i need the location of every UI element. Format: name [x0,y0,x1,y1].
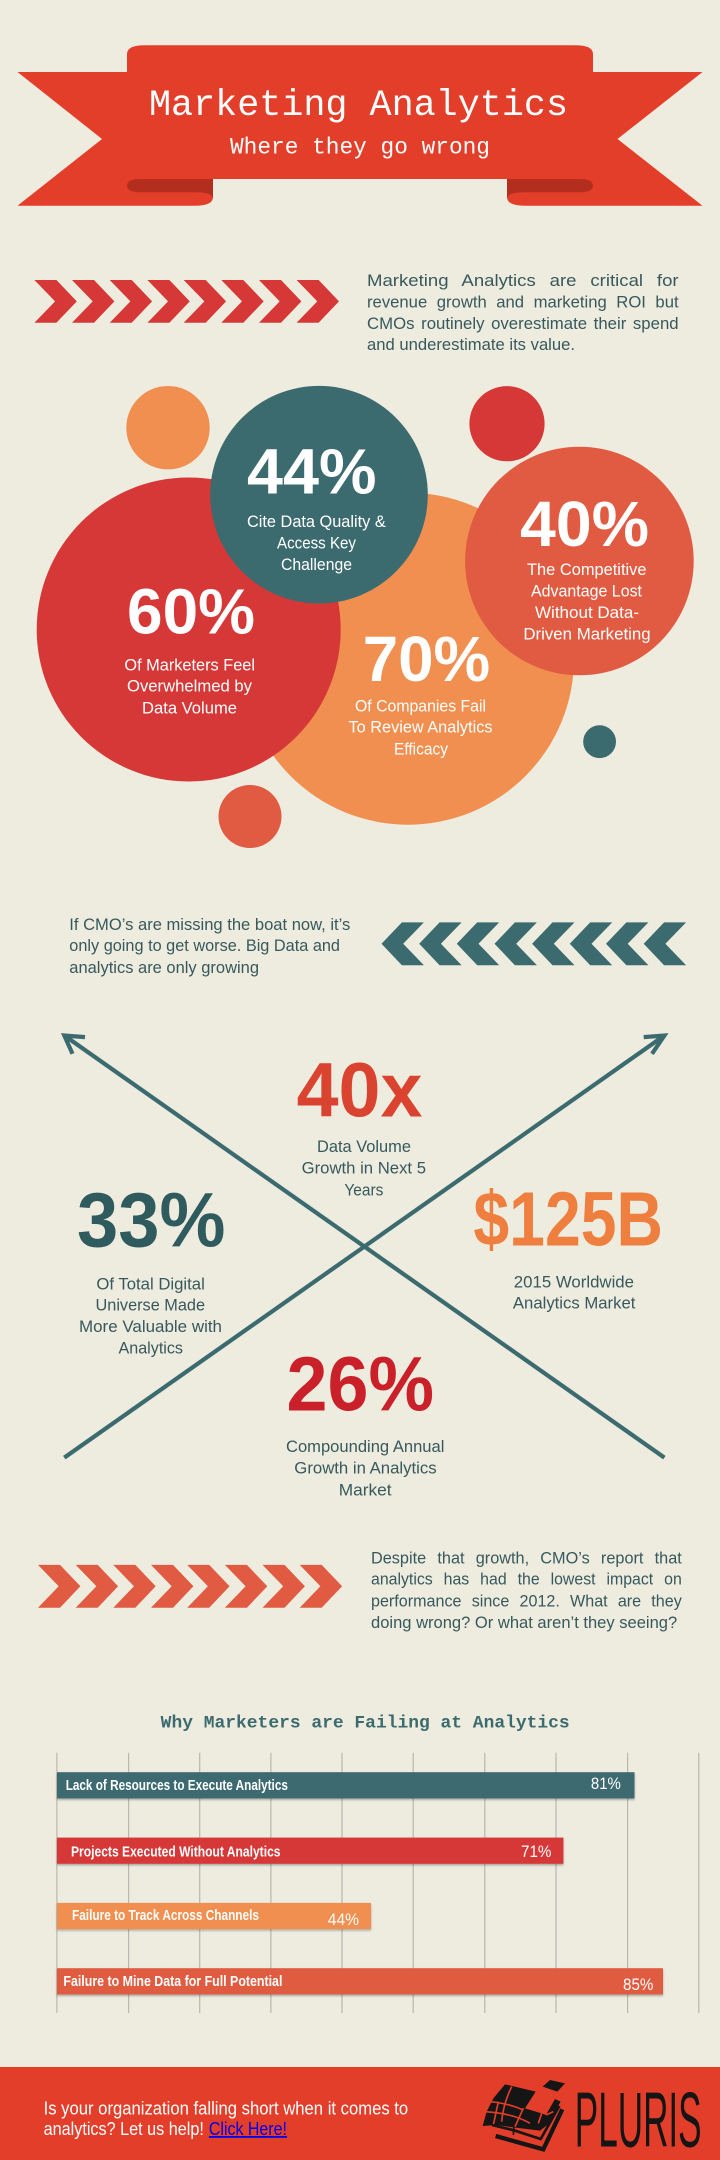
bar: lack of resources: Lack of Resources to Execute Analytics [66,1778,288,1794]
call to action: Click Here! [209,2119,287,2139]
bar: projects executed [57,1838,563,1864]
stat: 40x: Data Volume [317,1137,411,1156]
stat: 33 percent: 33% [77,1178,225,1264]
bar: failure to track: 44% [328,1911,359,1929]
bubble: 70 percent: Of Companies Fail [355,697,486,715]
intro text: Marketing Analytics are critical for [367,271,679,290]
intro text: and underestimate its value. [367,335,575,354]
ribbon fold left [127,179,213,199]
call to action: Is your organization falling short when it comes to [44,2098,408,2118]
stat: 26 percent: Growth in Analytics [294,1458,437,1478]
bubble: 60 percent [37,478,341,782]
bubble: small red [469,386,545,461]
chevron arrows: intro [34,280,339,323]
stat: 40x: Years [344,1180,383,1200]
bubble: small coral [218,785,282,848]
second text block [69,915,350,977]
stat: 33 percent: Of Total Digital [96,1274,205,1293]
stat: 26 percent: 26% [286,1342,434,1428]
third text block [371,1548,682,1632]
bar: projects executed: Projects Executed Without Analytics [71,1844,280,1860]
bubble: 40 percent: Without Data- [535,604,639,622]
bar: lack of resources [57,1772,634,1798]
footer [0,2067,720,2160]
bar chart [57,1753,699,2013]
second text block: If CMO’s are missing the boat now, it’s [69,915,350,934]
bubble: 40 percent: Driven Marketing [523,625,651,643]
third text block: analytics has had the lowest impact on [371,1570,682,1588]
second text block: analytics are only growing [69,958,259,977]
bubble: 70 percent: To Review Analytics [348,718,492,736]
bubble: 44 percent: 44% [247,435,376,507]
bubble: small teal [583,725,616,758]
bubble: 44 percent [210,386,428,604]
arrow: up left [64,1036,664,1458]
stat: 33 percent: More Valuable with [79,1317,222,1336]
intro text: CMOs routinely overestimate their spend [367,314,679,333]
stat: 40x: 40x [297,1048,423,1134]
bubble chart [37,386,694,848]
subtitle: Where they go wrong [230,134,490,160]
bubble: 40 percent [465,447,694,675]
bubble: 70 percent [242,493,574,825]
bubble: 44 percent: Access Key [277,534,357,552]
stat: 40x: Growth in Next 5 [302,1158,426,1178]
bar: lack of resources: 81% [591,1775,621,1793]
arrow: up right [64,1036,664,1458]
stat: 40x [297,1048,426,1200]
bubble: 70 percent: Efficacy [394,740,449,758]
stat: 125B [473,1176,663,1313]
bar: failure to track [57,1903,371,1929]
chevron arrows: pointing left [382,922,686,965]
icon: Pluris logo [483,2080,565,2149]
intro text: revenue growth and marketing ROI but [367,292,679,311]
bubble: small orange [126,386,210,469]
intro text [367,271,679,354]
bubble: 60 percent: Overwhelmed by [127,677,253,695]
ribbon shape [18,45,702,206]
bubble: 44 percent: Challenge [281,556,352,574]
call to action [44,2098,408,2139]
third text block: doing wrong? Or what aren’t they seeing? [371,1613,677,1632]
call to action: analytics? Let us help! [44,2119,204,2139]
ribbon fold right [507,179,593,199]
stat: 26 percent [286,1342,444,1500]
bar: failure to mine: 85% [623,1976,654,1994]
stat: 125B: 2015 Worldwide [514,1272,634,1291]
third text block: Despite that growth, CMO’s report that [371,1548,682,1567]
bubble: 44 percent: Cite Data Quality & [247,513,386,531]
bubble: 60 percent: Data Volume [142,699,237,717]
bar: failure to mine [57,1968,663,1994]
title banner [18,45,702,206]
footer band [0,2067,720,2160]
stat: 33 percent [77,1178,225,1358]
bubble: 40 percent: 40% [520,488,649,560]
second text block: only going to get worse. Big Data and [69,936,340,955]
stat: 26 percent: Market [339,1480,392,1500]
bar: failure to track: Failure to Track Across Channels [72,1908,259,1924]
stat: 33 percent: Universe Made [96,1296,205,1315]
bubble: 40 percent: The Competitive [527,561,646,579]
bubble: 40 percent: Advantage Lost [531,583,642,601]
stat: 26 percent: Compounding Annual [286,1437,444,1456]
bubble: 70 percent: 70% [363,623,490,695]
stat: 33 percent: Analytics [118,1338,183,1358]
bubble: 60 percent: 60% [127,575,255,647]
chevron arrows: coral [38,1565,342,1608]
third text block: performance since 2012. What are they [371,1592,682,1610]
main title: Marketing Analytics [149,85,568,127]
bar: failure to mine: Failure to Mine Data for Full Potential [63,1974,282,1990]
stat: 125B: Analytics Market [513,1294,636,1313]
chart heading: Why Marketers are Failing at Analytics [161,1713,570,1733]
crossed arrows [64,1036,664,1458]
bar: projects executed: 71% [521,1843,552,1861]
stat: 125B: $125B [473,1176,663,1262]
bubble: 60 percent: Of Marketers Feel [124,656,255,674]
